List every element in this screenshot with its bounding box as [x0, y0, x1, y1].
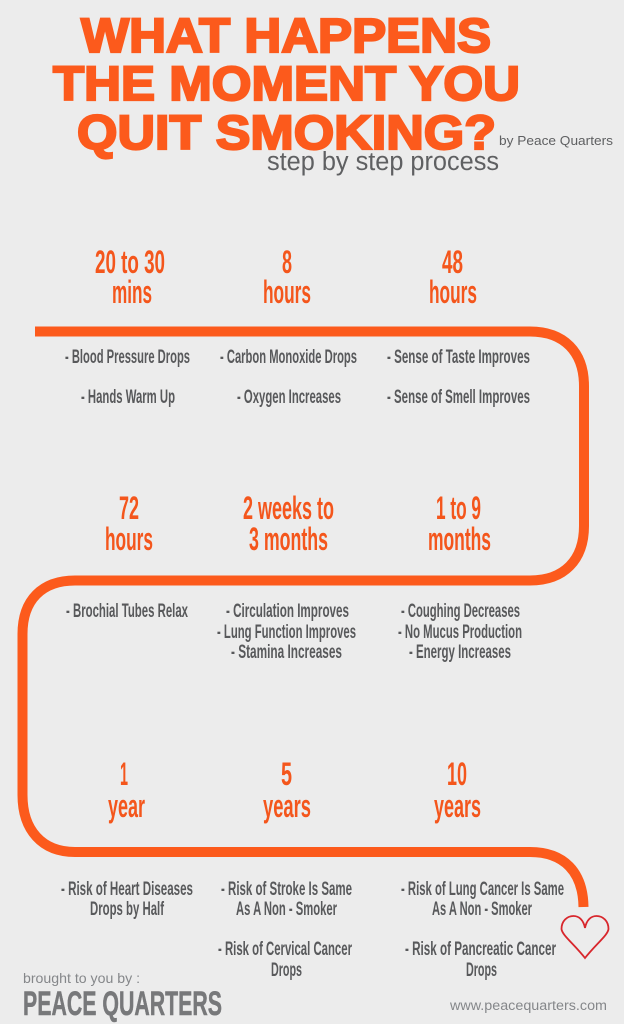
milestone: 5 years: [218, 756, 352, 981]
milestone: 20 to 30 mins: - Hands Warm Up: [81, 386, 175, 408]
milestone: 48 hours: [387, 244, 530, 408]
milestone: 20 to 30 mins: - Blood Pressure Drops: [65, 346, 190, 368]
milestone: 72 hours: hours: [105, 521, 153, 557]
milestone: 48 hours: - Sense of Smell Improves: [387, 386, 530, 408]
milestone: 1 year: 1: [120, 756, 128, 792]
milestone: 48 hours: hours: [429, 274, 477, 310]
milestone: 48 hours: - Sense of Taste Improves: [387, 346, 530, 368]
milestone: 8 hours: - Carbon Monoxide Drops: [220, 346, 357, 368]
milestone: 1 year: year: [108, 788, 145, 824]
milestone: 2 weeks to 3 months: - Stamina Increases: [231, 641, 342, 663]
milestone: 1 to 9 months: - Coughing Decreases: [401, 600, 520, 622]
milestone: 2 weeks to 3 months: 2 weeks to: [243, 490, 334, 526]
milestone: 5 years: - Risk of Stroke Is Same: [221, 878, 352, 900]
milestone: 1 year: [61, 756, 193, 920]
milestone: 72 hours: 72: [119, 490, 139, 526]
milestone: 2 weeks to 3 months: 3 months: [249, 521, 328, 557]
byline: by Peace Quarters: [499, 133, 614, 148]
milestone: 72 hours: - Brochial Tubes Relax: [66, 600, 188, 622]
milestone: 72 hours: [66, 490, 188, 622]
milestone: 1 to 9 months: - No Mucus Production: [398, 621, 522, 643]
milestone: 5 years: As A Non - Smoker: [236, 898, 337, 920]
milestone: 8 hours: - Oxygen Increases: [237, 386, 341, 408]
milestone: 5 years: Drops: [271, 959, 302, 981]
milestone: 1 to 9 months: - Energy Increases: [409, 641, 511, 663]
milestone: 48 hours: 48: [442, 244, 463, 280]
milestone: 2 weeks to 3 months: [217, 490, 356, 663]
milestone: 10 years: 10: [447, 756, 467, 792]
milestone: 1 to 9 months: 1 to 9: [436, 490, 481, 526]
title: [53, 10, 520, 160]
milestone: 8 hours: hours: [263, 274, 311, 310]
milestone: 8 hours: [220, 244, 357, 408]
subtitle: step by step process: [267, 148, 499, 176]
icon: heart: [562, 916, 608, 958]
milestone: 5 years: years: [263, 788, 311, 824]
website url: www.peacequarters.com: [449, 998, 607, 1013]
milestone: 1 to 9 months: [398, 490, 522, 663]
milestone: 1 year: - Risk of Heart Diseases: [61, 878, 193, 900]
milestone: 2 weeks to 3 months: - Circulation Improves: [226, 600, 349, 622]
title: QUIT SMOKING?: [77, 107, 496, 160]
milestone: 8 hours: 8: [282, 244, 292, 280]
title: THE MOMENT YOU: [53, 58, 520, 111]
milestone: 20 to 30 mins: mins: [112, 274, 152, 310]
milestone: 10 years: Drops: [466, 959, 497, 981]
milestone: 10 years: years: [434, 788, 481, 824]
milestone: 20 to 30 mins: [65, 244, 190, 408]
milestone: 2 weeks to 3 months: - Lung Function Improves: [217, 621, 356, 643]
milestone: 20 to 30 mins: 20 to 30: [95, 244, 165, 280]
milestone: 1 to 9 months: months: [428, 521, 491, 557]
milestone: 10 years: [401, 756, 564, 981]
milestone: 1 year: Drops by Half: [90, 898, 164, 920]
title: WHAT HAPPENS: [81, 10, 491, 63]
milestone: 10 years: As A Non - Smoker: [432, 898, 532, 920]
milestone: 5 years: 5: [281, 756, 292, 792]
brand: Peace Quarters: PEACE QUARTERS: [23, 985, 222, 1023]
credit: brought to you by: brought to you by :: [23, 970, 140, 986]
milestone: 5 years: - Risk of Cervical Cancer: [218, 938, 352, 960]
timeline path: [22, 332, 584, 907]
